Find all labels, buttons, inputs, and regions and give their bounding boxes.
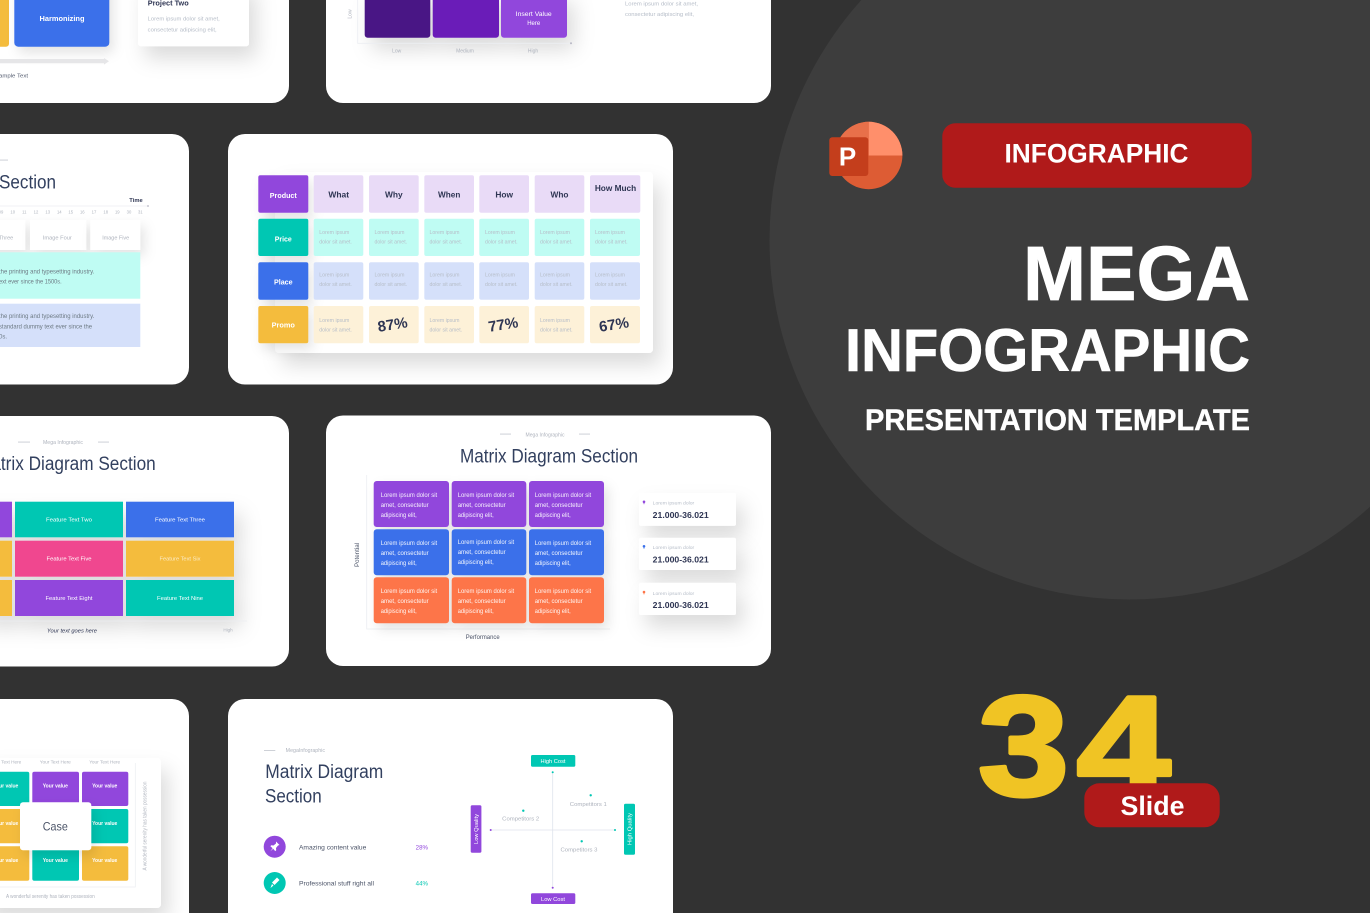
stat card two: 21.000-36.021 xyxy=(653,554,709,564)
badge: infographic: INFOGRAPHIC xyxy=(1004,138,1188,168)
brand line: MegaInfographic xyxy=(286,748,326,754)
matrix text purple row: amet, consectetur xyxy=(381,502,429,509)
header labels: Your Text Here xyxy=(89,760,121,766)
value cells xyxy=(0,772,128,881)
place row: dolor sit amet. xyxy=(595,282,628,288)
matrix text blue row: amet, consectetur xyxy=(535,550,583,557)
matrix text blue row: adipiscing elit, xyxy=(381,560,417,567)
big number 34: 4 xyxy=(1077,667,1171,826)
header labels: Your Text Here xyxy=(40,760,71,766)
stat card one: 21.000-36.021 xyxy=(653,510,709,520)
row heads: Product xyxy=(270,191,297,200)
place row: Lorem ipsum xyxy=(374,273,404,279)
matrix text blue row: adipiscing elit, xyxy=(458,559,494,566)
timeline: 18 xyxy=(103,210,109,214)
slide card: case matrix xyxy=(0,699,189,913)
promo row: dolor sit amet. xyxy=(540,327,573,333)
rotated caption: A wonderful serenity has taken possession xyxy=(142,781,148,870)
header row: When xyxy=(438,190,460,200)
image boxes: Image Five xyxy=(102,236,129,242)
header row: How Much xyxy=(595,183,636,193)
heading xyxy=(265,762,383,808)
row heads: Promo xyxy=(272,321,295,330)
stat card three: Lorem ipsum dolor xyxy=(653,591,695,597)
stat card one: Lorem ipsum dolor xyxy=(653,500,695,506)
stat card three: 21.000-36.021 xyxy=(653,600,709,610)
blue block Harmonizing: Harmonizing xyxy=(40,14,85,23)
timeline: 30 xyxy=(127,210,132,214)
insert value text xyxy=(516,11,552,27)
feature labels: Feature Text Five xyxy=(46,557,92,563)
slide card: marketing mix table xyxy=(228,134,673,384)
timeline: 10 xyxy=(10,210,16,214)
feature cells xyxy=(0,502,234,616)
list row one xyxy=(264,836,429,858)
place row: dolor sit amet. xyxy=(374,282,407,288)
stat card one xyxy=(639,493,736,526)
promo row: Lorem ipsum xyxy=(540,318,570,324)
competitor points: Competitors 3 xyxy=(560,847,598,853)
header labels xyxy=(0,760,121,766)
promo row: 67% xyxy=(598,314,630,336)
blue band xyxy=(0,304,140,347)
blue block Harmonizing xyxy=(14,0,109,47)
price row: dolor sit amet. xyxy=(540,239,573,245)
price row: dolor sit amet. xyxy=(374,239,407,245)
timeline: 17 xyxy=(92,210,97,214)
yellow block xyxy=(0,0,9,47)
small rule xyxy=(0,159,8,161)
description text: consectetur adipiscing elit, xyxy=(625,12,694,18)
inner white panel xyxy=(0,758,161,908)
place row: Lorem ipsum xyxy=(485,273,515,279)
list row one: 28% xyxy=(416,845,429,851)
header row: Who xyxy=(550,190,568,200)
matrix cells xyxy=(374,481,604,623)
slide card: matrix diagram section xyxy=(326,416,771,666)
description text: Lorem ipsum dolor sit amet, xyxy=(625,1,699,7)
matrix text blue row: amet, consectetur xyxy=(381,550,429,557)
low cost tag: Low Cost xyxy=(541,897,565,903)
competitor points: Competitors 1 xyxy=(570,802,607,808)
low quality tag xyxy=(471,805,481,853)
stat card three xyxy=(639,583,736,615)
place row: dolor sit amet. xyxy=(319,282,352,288)
icon: PowerPoint logo: P xyxy=(839,142,856,172)
place row: Lorem ipsum xyxy=(319,273,349,279)
axes: High xyxy=(528,48,538,54)
timeline: 15 xyxy=(68,210,74,214)
matrix text orange row: Lorem ipsum dolor sit xyxy=(381,588,437,595)
row heads xyxy=(258,175,308,343)
high cost tag: High Cost xyxy=(540,759,566,765)
brand line xyxy=(264,748,326,754)
matrix text blue row: amet, consectetur xyxy=(458,549,506,556)
axes: Medium xyxy=(456,48,474,54)
axes: Potential xyxy=(355,543,361,567)
teal band xyxy=(0,252,140,299)
high quality tag: High Quality xyxy=(628,813,634,845)
insert value text: Here xyxy=(527,20,541,27)
matrix text orange row: amet, consectetur xyxy=(381,598,429,605)
price row: Lorem ipsum xyxy=(374,230,404,236)
arrow xyxy=(0,58,109,65)
header row: What xyxy=(328,190,349,200)
price row: dolor sit amet. xyxy=(485,239,518,245)
big number 34: 3 xyxy=(978,667,1069,826)
feature labels: Feature Text Six xyxy=(160,557,201,563)
place row xyxy=(314,262,640,300)
footer caption: A wonderful serenity has taken possession xyxy=(6,894,95,900)
heading Section: Section xyxy=(0,172,56,193)
timeline: 19 xyxy=(115,210,120,214)
promo row: Lorem ipsum xyxy=(430,318,459,324)
timeline: 16 xyxy=(80,210,85,214)
feature labels: Feature Text Three xyxy=(155,517,205,523)
matrix text orange row: amet, consectetur xyxy=(458,598,506,605)
promo row: dolor sit amet. xyxy=(430,327,462,333)
value cells: Your value xyxy=(92,784,118,790)
feature labels: Feature Text Nine xyxy=(157,596,203,602)
competitor points: Competitors 2 xyxy=(502,817,539,823)
matrix text orange row: amet, consectetur xyxy=(535,598,583,605)
matrix text orange row: Lorem ipsum dolor sit xyxy=(458,588,514,595)
heading: Matrix Diagram xyxy=(265,762,383,783)
matrix text orange row xyxy=(381,588,591,615)
heading: Section xyxy=(265,787,322,808)
decorative large circle xyxy=(770,0,1370,600)
matrix text purple row: amet, consectetur xyxy=(535,502,583,509)
subtitle: PRESENTATION TEMPLATE xyxy=(865,404,1250,437)
slide card: top heat matrix xyxy=(326,0,771,103)
promo row xyxy=(314,306,640,343)
timeline: 11 xyxy=(22,210,27,214)
matrix text purple row: Lorem ipsum dolor sit xyxy=(381,492,437,499)
price row: dolor sit amet. xyxy=(319,239,352,245)
place row: dolor sit amet. xyxy=(430,282,462,288)
price row: Lorem ipsum xyxy=(485,230,515,236)
price row: dolor sit amet. xyxy=(430,239,462,245)
heading: Matrix Diagram Section xyxy=(460,447,638,468)
feature labels xyxy=(46,517,205,602)
axes: Low xyxy=(348,9,354,19)
title: INFOGRAPHIC: INFOGRAPHIC xyxy=(845,317,1250,384)
promo row: 87% xyxy=(376,314,409,336)
axes xyxy=(348,0,572,54)
high cost tag xyxy=(531,755,575,767)
timeline xyxy=(0,198,149,214)
blue band: the printing and typesetting industry. xyxy=(0,314,95,320)
price row: Lorem ipsum xyxy=(595,230,625,236)
badge: infographic xyxy=(942,123,1252,188)
slide card: feature matrix xyxy=(0,416,289,666)
case card: Case xyxy=(43,820,68,834)
axes: Low xyxy=(392,48,402,54)
slide card: positioning map xyxy=(228,699,673,913)
axis labels: High xyxy=(223,628,233,632)
case card xyxy=(20,802,91,850)
promo row: dolor sit amet. xyxy=(319,327,352,333)
axes xyxy=(355,475,610,641)
value cells: Your value xyxy=(43,858,68,864)
title: MEGA: MEGA xyxy=(1023,231,1250,317)
price row: Lorem ipsum xyxy=(319,230,349,236)
matrix text purple row: adipiscing elit, xyxy=(535,512,571,519)
heat cells xyxy=(365,0,567,38)
brand line xyxy=(500,432,590,438)
feature labels: Feature Text Two xyxy=(46,517,92,523)
slide card: gantt section xyxy=(0,134,189,384)
teal band: the printing and typesetting industry. xyxy=(0,270,95,276)
place row: dolor sit amet. xyxy=(485,282,518,288)
low quality tag: Low Quality xyxy=(474,814,480,844)
axes: Performance xyxy=(466,635,500,641)
matrix text blue row xyxy=(381,539,591,567)
teal band: ext ever since the 1500s. xyxy=(0,280,62,286)
place row: Lorem ipsum xyxy=(430,273,459,279)
timeline: 13 xyxy=(45,210,51,214)
big number 34 xyxy=(978,667,1171,826)
promo row: 77% xyxy=(487,314,519,336)
stat card two: Lorem ipsum dolor xyxy=(653,545,695,551)
place row: dolor sit amet. xyxy=(540,282,573,288)
project two card: Lorem ipsum dolor sit amet, xyxy=(148,16,220,22)
promo row: Lorem ipsum xyxy=(319,318,349,324)
matrix text purple row: adipiscing elit, xyxy=(381,512,417,519)
list row two: 44% xyxy=(416,882,429,888)
insert value text: Insert Value xyxy=(516,11,552,18)
stat card two xyxy=(639,538,736,570)
project two card xyxy=(138,0,249,46)
place row: Lorem ipsum xyxy=(540,273,570,279)
project two card: consectetur adipiscing elit, xyxy=(148,28,217,34)
axis labels xyxy=(0,621,247,635)
timeline: 14 xyxy=(57,210,62,214)
matrix text blue row: Lorem ipsum dolor sit xyxy=(535,540,591,547)
value cells: Your value xyxy=(92,858,118,864)
description text xyxy=(625,1,699,18)
list row two: Professional stuff right all xyxy=(299,880,374,888)
high quality tag xyxy=(624,804,635,855)
timeline: 12 xyxy=(34,210,39,214)
header row xyxy=(314,175,640,213)
axis labels: Your text goes here xyxy=(47,629,97,635)
matrix text purple row: amet, consectetur xyxy=(458,502,506,509)
competitor points xyxy=(502,794,607,853)
matrix text orange row: adipiscing elit, xyxy=(535,608,571,615)
matrix text orange row: Lorem ipsum dolor sit xyxy=(535,588,591,595)
low cost tag xyxy=(531,893,575,904)
image boxes: Image Four xyxy=(43,236,72,242)
value cells: Your value xyxy=(43,784,68,790)
badge: slide: Slide xyxy=(1120,791,1184,821)
brand line: Mega Infographic xyxy=(526,432,565,438)
matrix text purple row: Lorem ipsum dolor sit xyxy=(458,492,514,499)
image boxes xyxy=(0,220,140,250)
icon: PowerPoint logo xyxy=(829,122,902,189)
row heads: Place xyxy=(274,277,293,286)
place row: Lorem ipsum xyxy=(595,273,625,279)
slide card: top left process xyxy=(0,0,289,103)
header row: Why xyxy=(385,190,403,200)
matrix text purple row xyxy=(381,492,591,519)
axes xyxy=(0,763,135,887)
price row xyxy=(314,219,640,256)
matrix text blue row: adipiscing elit, xyxy=(535,560,571,567)
header row: How xyxy=(495,190,513,200)
matrix text orange row: adipiscing elit, xyxy=(381,608,417,615)
matrix text purple row: Lorem ipsum dolor sit xyxy=(535,492,591,499)
price row: Lorem ipsum xyxy=(430,230,459,236)
matrix text purple row: adipiscing elit, xyxy=(458,512,494,519)
matrix text blue row: Lorem ipsum dolor sit xyxy=(381,540,437,547)
badge: slide xyxy=(1084,783,1220,827)
matrix text orange row: adipiscing elit, xyxy=(458,608,494,615)
price row: dolor sit amet. xyxy=(595,239,628,245)
price row: Lorem ipsum xyxy=(540,230,570,236)
table backing panel xyxy=(275,172,653,353)
list row two xyxy=(264,872,429,894)
brand line xyxy=(18,440,109,446)
timeline: Time xyxy=(129,198,143,204)
value cells: Your value xyxy=(92,821,118,827)
feature labels: Feature Text Eight xyxy=(46,596,93,602)
row heads: Price xyxy=(275,234,292,243)
cross axes xyxy=(490,771,616,889)
blue band: standard dummy text ever since the xyxy=(0,324,93,330)
list row one: Amazing content value xyxy=(299,844,367,851)
matrix text blue row: Lorem ipsum dolor sit xyxy=(458,539,514,546)
timeline: 31 xyxy=(138,210,143,214)
brand line: Mega Infographic xyxy=(43,440,84,446)
